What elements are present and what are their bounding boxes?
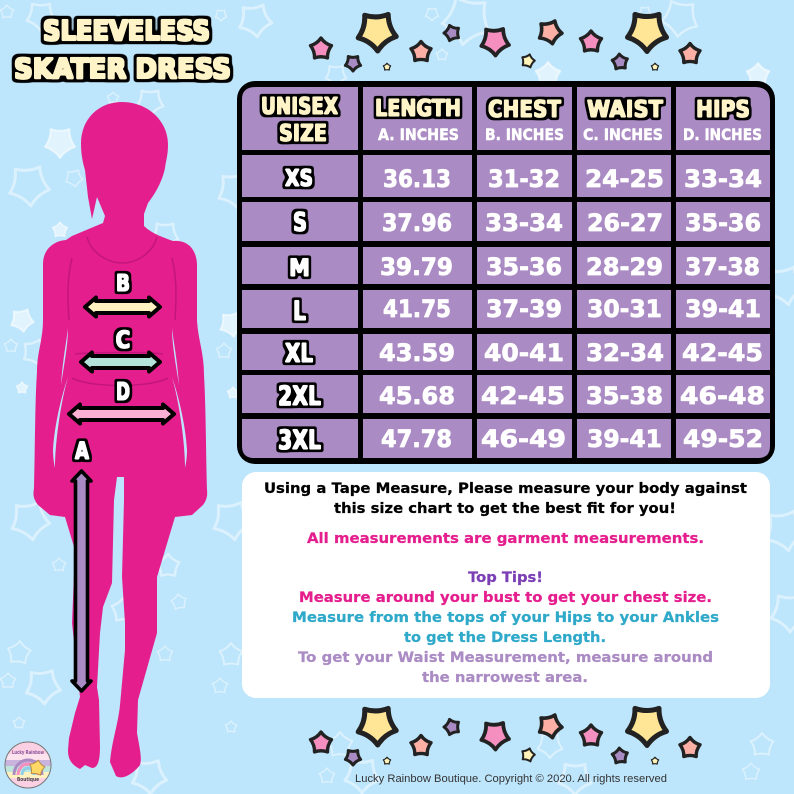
decorative star row: bottom: [311, 708, 700, 765]
arrow B: [85, 298, 160, 316]
row 2XL: [278, 381, 765, 412]
row L: 39-41: [685, 295, 761, 323]
waist tip: the narrowest area.: [422, 670, 588, 686]
row L: 37-39: [486, 295, 562, 323]
waist tip: To get your Waist Measurement, measure around: [298, 650, 713, 666]
letter B: B: [116, 271, 130, 297]
copyright: Lucky Rainbow Boutique. Copyright © 2020. All rights reserved: [355, 773, 667, 785]
row S: [293, 208, 761, 238]
row XS: 33-34: [684, 165, 762, 193]
background filled stars: [9, 62, 769, 398]
row XL: [285, 339, 763, 369]
row 2XL: 2XL: [278, 381, 321, 412]
row M: 35-36: [486, 253, 562, 281]
letter D: D: [116, 377, 130, 406]
row L: 30-31: [587, 295, 662, 323]
row 3XL: 3XL: [278, 425, 321, 456]
arrow A: [72, 471, 91, 691]
dress crease lines: [68, 237, 176, 386]
row 2XL: 45.68: [379, 382, 455, 410]
row 3XL: 49-52: [683, 425, 763, 453]
row L: L: [293, 296, 306, 327]
length tip: Measure from the tops of your Hips to your Ankles: [292, 610, 719, 626]
title: SKATER DRESS: [14, 52, 231, 85]
arm gaps: [53, 328, 187, 468]
title: SLEEVELESS: [43, 14, 210, 47]
row S: 37.96: [382, 209, 452, 237]
panel background: [242, 472, 770, 698]
row XS: 24-25: [585, 165, 664, 193]
garment note: All measurements are garment measurements.: [307, 531, 704, 547]
row XL: 40-41: [484, 339, 564, 367]
arrow D: [69, 404, 174, 424]
row M: 37-38: [685, 253, 760, 281]
row L: [293, 295, 761, 327]
row XL: 43.59: [379, 339, 455, 367]
header row: LENGTH: [375, 96, 461, 122]
row 3XL: [278, 425, 763, 456]
intro text: this size chart to get the best fit for you!: [334, 501, 676, 517]
row XS: [285, 165, 762, 193]
row XS: 31-32: [488, 165, 560, 193]
waist tip: [298, 650, 713, 686]
header row: [261, 94, 762, 147]
table frame: [237, 81, 775, 464]
length tip: [292, 610, 719, 646]
header row: CHEST: [488, 97, 561, 123]
row M: 28-29: [586, 253, 663, 281]
letter C: C: [116, 326, 130, 354]
row S: 35-36: [685, 209, 761, 237]
size table: [237, 81, 775, 464]
intro text: [264, 481, 747, 517]
logo badge: Boutique: [17, 777, 39, 783]
row M: 39.79: [380, 253, 453, 281]
header row: B. INCHES: [485, 125, 564, 144]
figure silhouette with measurement arrows: [33, 102, 207, 777]
length tip: to get the Dress Length.: [404, 630, 606, 646]
logo badge: [5, 742, 51, 788]
row 3XL: 47.78: [381, 425, 452, 453]
header row: WAIST: [587, 97, 663, 123]
row 3XL: 39-41: [587, 425, 662, 453]
row XL: XL: [285, 339, 313, 369]
instructions panel: [242, 472, 770, 698]
logo badge: Lucky Rainbow: [12, 750, 44, 756]
row S: S: [293, 208, 307, 238]
row XL: 32-34: [586, 339, 664, 367]
header row: SIZE: [279, 121, 327, 147]
row M: [289, 253, 760, 282]
row 2XL: 42-45: [481, 382, 565, 410]
row S: 26-27: [587, 209, 663, 237]
row 2XL: 35-38: [586, 382, 663, 410]
header row: HIPS: [696, 97, 750, 123]
row 3XL: 46-49: [481, 425, 566, 453]
row M: M: [289, 254, 310, 282]
header row: UNISEX: [261, 94, 338, 120]
header row: D. INCHES: [683, 125, 762, 144]
row S: 33-34: [485, 209, 563, 237]
header row: C. INCHES: [583, 125, 663, 144]
row XL: 42-45: [682, 339, 763, 367]
row L: 41.75: [383, 295, 451, 323]
title: [14, 14, 231, 85]
body silhouette: [33, 102, 207, 777]
intro text: Using a Tape Measure, Please measure your body against: [264, 481, 747, 497]
row XS: 36.13: [383, 165, 451, 193]
header row: A. INCHES: [378, 125, 459, 144]
decorative star row: top: [311, 14, 700, 71]
row 2XL: 46-48: [680, 382, 765, 410]
top tips heading: Top Tips!: [468, 570, 543, 586]
row XS: XS: [285, 166, 313, 192]
letter A: A: [75, 437, 89, 465]
table cells: [242, 87, 770, 458]
arrow C: [81, 352, 160, 372]
chest tip: Measure around your bust to get your chest size.: [299, 590, 712, 606]
